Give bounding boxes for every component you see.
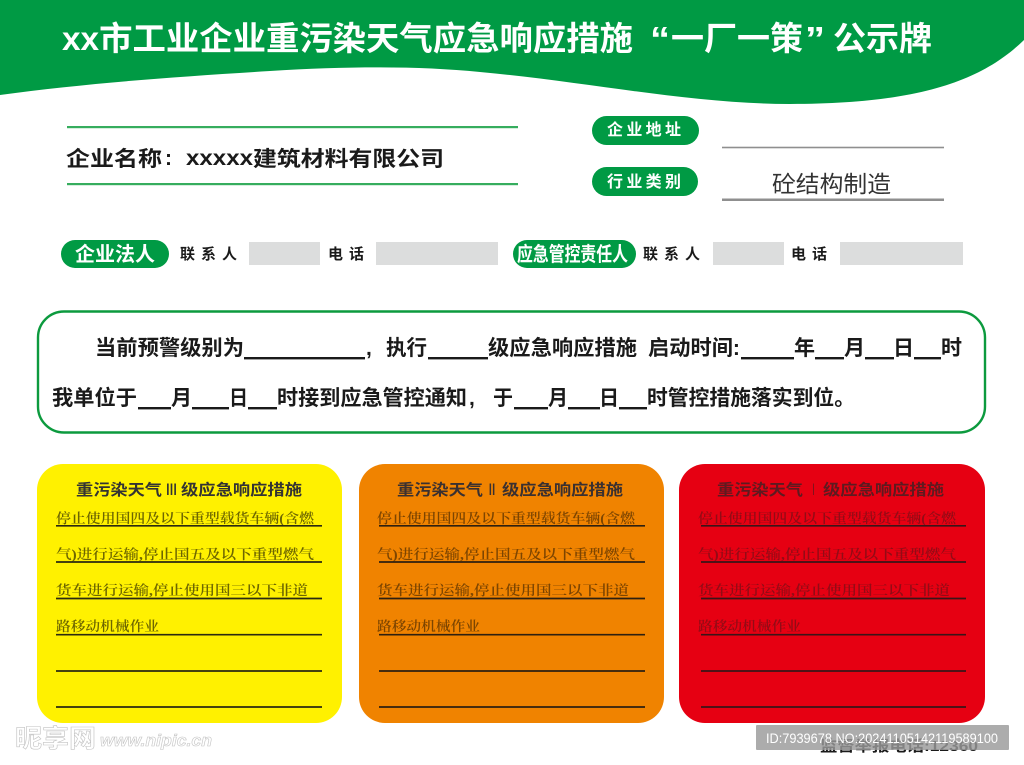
company name: xxxxx: [186, 147, 253, 170]
title: “: [650, 20, 670, 57]
panel: level III yellow: [37, 464, 342, 723]
level II measures: 气)进行运输,停止国五及以下重型燃气: [377, 546, 636, 562]
level I heading: [717, 480, 945, 499]
notice line one: ,: [366, 337, 372, 360]
industry field: [592, 167, 944, 201]
company name: [66, 147, 444, 171]
level II heading: 级应急响应措施: [502, 480, 624, 499]
report hotline: 监督举报电话:12360: [820, 737, 978, 755]
title: [62, 20, 932, 57]
panel: level II orange: [359, 464, 664, 723]
level II heading: 重污染天气: [397, 481, 484, 499]
level III heading: 重污染天气: [76, 481, 163, 499]
level I heading: 级应急响应措施: [823, 480, 945, 499]
company name: :: [165, 147, 172, 170]
notice line one: 启动时间:: [648, 337, 740, 360]
level III heading: 级应急响应措施: [181, 480, 303, 499]
title: xx市工业企业重污染天气应急响应措施: [62, 20, 633, 57]
address label: 企业地址: [607, 120, 681, 139]
level II measures: 路移动机械作业: [377, 618, 481, 634]
notice line two: [52, 386, 855, 410]
level II heading: Ⅱ: [487, 482, 497, 499]
level III measures: 路移动机械作业: [56, 618, 160, 634]
level III measures: 气)进行运输,停止国五及以下重型燃气: [56, 546, 315, 562]
level III measures: 货车进行运输,停止使用国三以下非道: [56, 582, 309, 598]
notice line two: 日: [599, 387, 619, 410]
level I measures: 路移动机械作业: [698, 618, 802, 634]
level II measures: 停止使用国四及以下重型载货车辆(含燃: [377, 510, 637, 526]
warning notice panel: [38, 312, 985, 432]
industry value: 砼结构制造: [772, 171, 891, 197]
title: ”: [805, 20, 825, 57]
notice line one: [95, 336, 962, 360]
notice line one: 级应急响应措施: [488, 336, 637, 360]
watermark: 昵享网: [15, 725, 96, 753]
watermark: www.nipic.cn: [100, 731, 212, 750]
level II measures: [377, 510, 637, 634]
emergency officer row: [513, 240, 963, 268]
notice line one: 时: [941, 337, 962, 360]
notice line two: 月: [548, 387, 568, 410]
level I measures: 货车进行运输,停止使用国三以下非道: [698, 582, 951, 598]
level III heading: Ⅲ: [166, 482, 177, 499]
notice line one: 日: [893, 337, 914, 360]
level I heading: 重污染天气: [717, 481, 804, 499]
level I measures: [698, 510, 958, 634]
notice line two: 月: [171, 387, 192, 410]
image id text: ID:7939678 NO:20241105142119589100: [766, 731, 998, 746]
level III measures: [56, 510, 316, 634]
notice line two: 于: [493, 387, 513, 410]
level I measures: 停止使用国四及以下重型载货车辆(含燃: [698, 510, 958, 526]
notice line two: 时接到应急管控通知: [277, 386, 467, 410]
notice line two: 我单位于: [52, 386, 137, 410]
title: 一厂一策: [671, 20, 803, 57]
legal representative label: 企业法人: [75, 242, 155, 266]
panel: level I red: [679, 464, 985, 723]
phone label: 电话: [791, 246, 827, 263]
header banner: [0, 0, 1024, 104]
company name: 企业名称: [66, 147, 162, 171]
notice line one: 月: [844, 337, 865, 360]
address field: [592, 116, 944, 148]
notice line one: 执行: [386, 337, 427, 360]
level I heading: Ⅰ: [811, 482, 816, 499]
notice line two: ,: [469, 387, 475, 410]
company name: 建筑材料有限公司: [253, 147, 444, 171]
level II heading: [397, 480, 624, 499]
notice line one: 当前预警级别为: [95, 337, 244, 360]
level II measures: 货车进行运输,停止使用国三以下非道: [377, 582, 630, 598]
notice line two: 日: [229, 387, 248, 410]
legal representative row: [61, 240, 498, 268]
level I measures: 气)进行运输,停止国五及以下重型燃气: [698, 546, 957, 562]
image id bar: [756, 725, 1009, 750]
contact label: 联系人: [643, 245, 700, 263]
emergency officer label: 应急管控责任人: [517, 242, 628, 266]
title: 公示牌: [833, 20, 932, 57]
company name block: [66, 126, 518, 185]
notice line two: 时管控措施落实到位。: [647, 386, 855, 410]
contact label: 联系人: [180, 245, 237, 263]
level III heading: [76, 480, 303, 499]
watermark: [15, 725, 212, 753]
phone label: 电话: [328, 246, 364, 263]
industry label: 行业类别: [607, 173, 681, 191]
level III measures: 停止使用国四及以下重型载货车辆(含燃: [56, 510, 316, 526]
notice line one: 年: [794, 337, 815, 360]
